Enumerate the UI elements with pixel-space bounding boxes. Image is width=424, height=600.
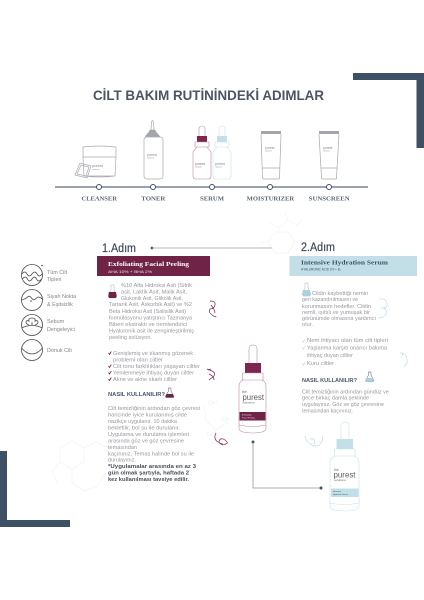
heading: step 1: 1.Adım: [102, 243, 136, 255]
product: toner bottle: [144, 120, 163, 179]
product: large maroon serum bottle: the: [242, 390, 247, 394]
product: large teal serum bottle: [330, 422, 359, 511]
icon: teal flask: [302, 283, 311, 296]
text: peeling description: peeling solüsyon.: [109, 335, 152, 341]
text: peeling description: Beta Hidroksi Asit (Salisilik Asit): [109, 309, 186, 315]
decorative molecules background: OH: [208, 401, 217, 407]
list: peeling target skin: [108, 351, 200, 383]
timeline labels: SUNSCREEN: [309, 196, 350, 202]
product: maroon serum bottle: [193, 126, 211, 179]
text: hydration usage: [302, 390, 389, 414]
list: peeling target skin: problemi olan ciltler: [113, 358, 163, 364]
list: hydration target skin: Kuru ciltler: [307, 361, 334, 367]
icon: blackheads: [22, 290, 42, 310]
heading: how to use, step 2: NASIL KULLANILIR?: [302, 378, 358, 384]
routine timeline: [55, 184, 368, 190]
text: hydration description: geri kazandırılmasını ve: [302, 297, 358, 303]
text: peeling usage: [108, 406, 200, 464]
list: peeling target skin: Yenilenmeye ihtiyaç duyan ciltler: [113, 370, 194, 376]
skin type labels: Sebum: [47, 319, 65, 325]
text: hydration description: korunmasını hedefler. Cildin: [302, 304, 371, 310]
skin type labels: Tüm Cilt: [47, 270, 68, 276]
product: moisturizer tube: solutions: [265, 150, 272, 152]
text: peeling description: Tartarik Asit, Askorbik Asit) ve %2: [109, 302, 192, 308]
text: hydration usage: uygulayınız. Göz ve göz çevresine: [302, 402, 384, 408]
text: hydration description: olur.: [302, 322, 313, 328]
list: peeling target skin: Cilt tonu farklılıkları yaşayan ciltler: [113, 364, 200, 370]
text: peeling usage warning: gün olmak şartıyla, haftada 2: [108, 470, 189, 476]
decorative molecules background: OH: [222, 417, 231, 423]
list: hydration target skin: ihtiyaç duyan ciltler: [307, 353, 353, 359]
text: peeling usage warning: kez kullanılması tavsiye edilir.: [108, 477, 189, 483]
text: peeling usage: Uygulama ve durulama işlemleri: [108, 432, 189, 438]
skin type labels: Donuk Cilt: [47, 348, 72, 354]
text: peeling usage: arasında göz ve göz çevresine: [108, 438, 184, 444]
text: peeling description: %10 Alfa Hidroksi Asit (Sitrik: [121, 283, 192, 289]
product: teal serum bottle: purest: [215, 162, 225, 166]
panel: hydration serum banner: Intensive Hydration Serum: [301, 260, 389, 266]
skin type labels: Dengeleyici: [47, 327, 75, 333]
timeline labels: SERUM: [200, 196, 224, 202]
product: large teal serum bottle: solutions: [334, 478, 346, 482]
skin type labels: Siyah Nokta: [47, 294, 76, 300]
product: large maroon serum bottle: purest: [242, 392, 265, 402]
product: teal serum bottle: [213, 126, 231, 179]
text: peeling usage: Cilt temizliğinin ardından göz çevresi: [108, 406, 200, 412]
product: toner bottle: solutions: [147, 156, 154, 160]
list: peeling target skin: Genişlemiş ve tıkanmış gözenek: [113, 351, 193, 357]
panel: exfoliating peeling banner: AHA 10% + BHA 2%: [108, 270, 153, 274]
icon: maroon flask: [108, 285, 117, 298]
text: peeling description: Biberi ekstraktı ve nemlendirici: [109, 322, 187, 328]
text: peeling description: formülasyonu yatıştırıcı Tazmanya: [109, 316, 192, 322]
text: hydration usage: gece birkaç damla şeklinde: [302, 396, 369, 402]
text: peeling description: asit, Laktik Asit, Malik Asit,: [121, 290, 187, 296]
skin type labels: & Eşitsizlik: [47, 302, 73, 308]
text: hydration usage: temasından kaçınınız.: [302, 408, 353, 414]
text: hydration usage: Cilt temizliğinin ardından gündüz ve: [302, 390, 389, 396]
product: maroon serum bottle: purest: [195, 162, 205, 166]
decorative squiggles: maroon: [207, 301, 227, 445]
corner bracket: bottom left: [0, 451, 70, 527]
product: toner bottle: purest: [147, 153, 157, 157]
heading: step 2: 2.Adım: [301, 242, 335, 254]
panel: exfoliating peeling banner: Exfoliating Facial Peeling: [108, 261, 190, 268]
connector line: maroon bottle to teal bottle: [252, 440, 322, 490]
list: hydration target skin: Nem ihtiyacı olan tüm cilt tipleri: [307, 338, 388, 344]
decorative squiggles: teal: [305, 299, 407, 446]
product: large teal serum bottle: Hydration Serum: [333, 493, 348, 496]
list: hydration target skin: [302, 338, 388, 367]
panel: exfoliating peeling banner: [97, 256, 210, 276]
list: peeling target skin: Akne ve akne skarlı ciltler: [113, 377, 177, 383]
list: hydration target skin: Yaşlanma karşıtı onarıcı bakıma: [307, 346, 387, 352]
text: peeling usage: nazikçe uygulanır. 10 dakika: [108, 419, 177, 425]
heading: how to use, step 2: [302, 372, 374, 384]
decorative molecules background: O: [207, 432, 212, 438]
product: sunscreen tube: [319, 131, 339, 179]
product: cleanser jar: [75, 146, 116, 178]
panel: hydration serum banner: HYALURONIC ACID 2% + B₅: [301, 268, 341, 272]
product: large teal serum bottle: purest: [334, 470, 356, 480]
product: moisturizer tube: [261, 131, 281, 179]
skin type labels: [47, 270, 76, 354]
text: peeling description: Hyaluronik asit ile zenginleştirilmiş: [109, 328, 194, 334]
product: large maroon serum bottle: solutions: [242, 400, 255, 404]
text: peeling description: Glukonik Asit, Glikolik Asit,: [121, 296, 183, 302]
product: teal serum bottle: solutions: [215, 166, 222, 168]
heading: how to use, step 1: [108, 388, 174, 398]
text: peeling usage: temasından: [108, 445, 137, 451]
product: large maroon serum bottle: [239, 345, 266, 433]
text: peeling usage warning: [108, 464, 197, 483]
product: large teal serum bottle: the: [334, 468, 339, 472]
icon: all skin types: [22, 264, 43, 286]
product: cleanser jar: solutions: [92, 168, 99, 171]
corner bracket: top right: [353, 73, 424, 148]
text: hydration description: [302, 291, 376, 328]
title: CİLT BAKIM RUTİNİNDEKİ ADIMLAR: [93, 87, 324, 103]
product: large maroon serum bottle: Facial Peeling: [242, 418, 255, 420]
text: peeling usage: haricinde iyice kurulanmış cilde: [108, 412, 187, 418]
text: hydration description: Cildin kaybettiği nemin: [312, 291, 368, 297]
icon: sebum balance: [22, 314, 42, 336]
product: sunscreen tube: purest: [323, 146, 332, 150]
decorative molecules background: [52, 213, 307, 491]
timeline labels: MOISTURIZER: [247, 196, 295, 202]
skin type labels: Tipleri: [47, 277, 61, 283]
timeline labels: TONER: [141, 196, 166, 202]
product: cleanser jar: purest: [92, 163, 104, 168]
product: maroon serum bottle: solutions: [195, 166, 202, 168]
product: large teal serum bottle: Intensive: [333, 490, 342, 493]
panel: hydration serum banner: [290, 256, 417, 276]
text: hydration description: görünümde olmasına yardımcı: [302, 316, 376, 322]
text: peeling usage: durulayınız.: [108, 458, 136, 464]
skin type icons: [22, 264, 43, 360]
connector line: step 1 to step 2: [151, 247, 272, 249]
text: peeling description: [109, 283, 194, 341]
product: moisturizer tube: purest: [265, 146, 274, 150]
timeline labels: [82, 196, 350, 202]
product: sunscreen tube: solutions: [323, 150, 330, 152]
timeline labels: CLEANSER: [82, 196, 117, 202]
text: hydration description: nemli, ışıltılı ve yumuşak bir: [302, 310, 370, 316]
icon: dull skin: [22, 340, 42, 360]
heading: how to use, step 1: NASIL KULLANILIR?: [108, 392, 166, 398]
text: peeling usage: bekletilir, bol su ile durulanır.: [108, 426, 180, 432]
product: large maroon serum bottle: Exfoliating: [242, 414, 251, 416]
text: peeling usage warning: *Uygulamalar arasında en az 3: [108, 464, 197, 470]
text: peeling usage: kaçınınız. Temas halinde bol su ile: [108, 452, 194, 458]
